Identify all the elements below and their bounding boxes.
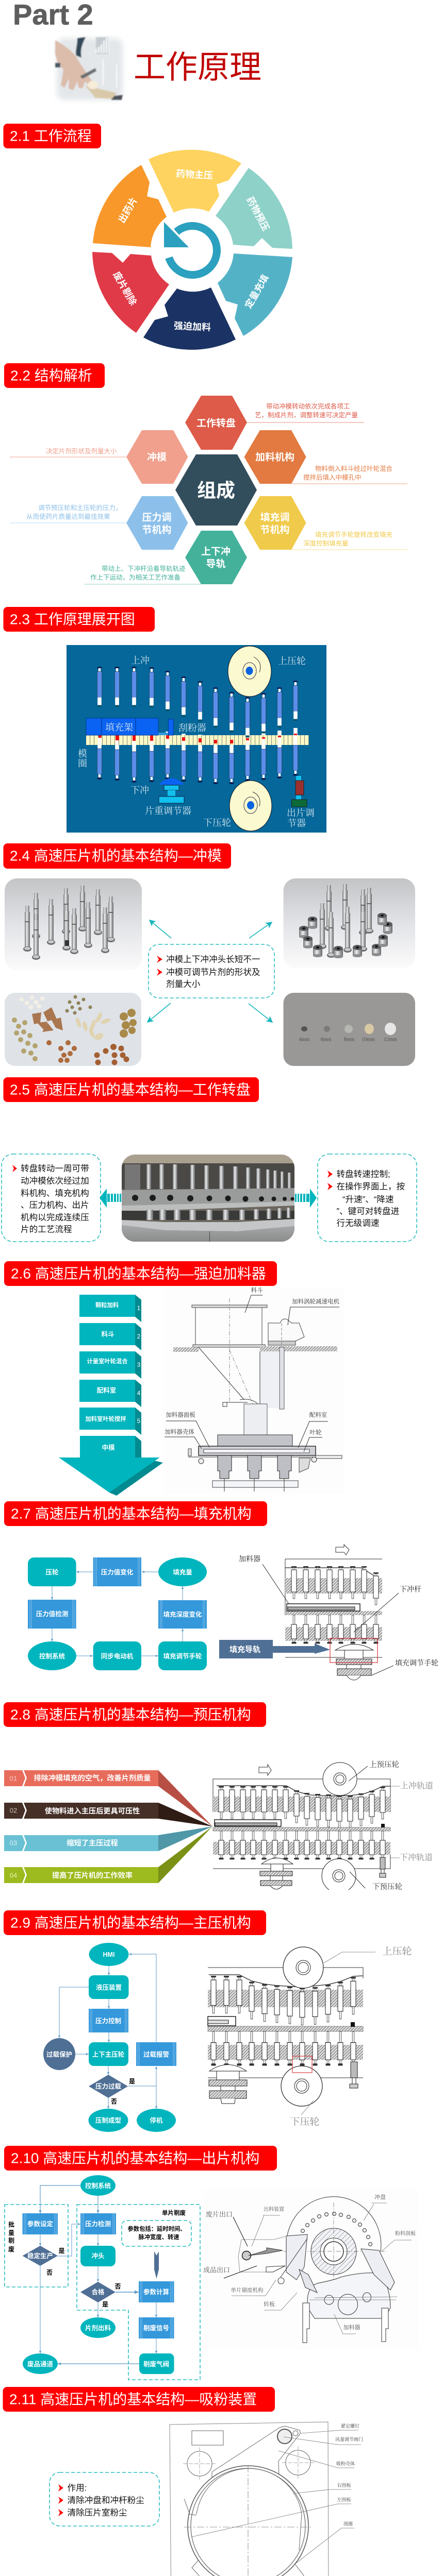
hex: 上下冲导轨: 导轨 bbox=[206, 557, 226, 570]
drawing labels: 下冲轨道 bbox=[400, 1853, 433, 1862]
pre-compression benefit ribbons bbox=[4, 1770, 212, 1883]
feeder step stack bbox=[59, 1295, 163, 1496]
node: 压力控制: 压力控制 bbox=[95, 2017, 121, 2025]
diagram labels: 节器 bbox=[287, 818, 306, 828]
filling rack: 填充架 bbox=[105, 722, 133, 733]
note: 加料机构: 搅拌后填入中模孔中 bbox=[303, 473, 362, 481]
heading 2.7 bbox=[4, 1501, 267, 1526]
drawing labels bbox=[239, 1555, 438, 1675]
heading 2.4: 2.4 高速压片机的基本结构—冲模 bbox=[10, 848, 222, 863]
connectors bbox=[52, 1572, 183, 1656]
step 4: 4 bbox=[137, 1389, 141, 1397]
process wheel bbox=[92, 150, 292, 350]
node: 过载保护 bbox=[43, 2038, 75, 2070]
diagram labels: 刮粉器 bbox=[178, 723, 206, 733]
note: 压力调节机构: 从而使药片质量达到最佳效果 bbox=[26, 513, 110, 520]
node: HMI bbox=[89, 1943, 129, 1966]
hex: 冲模: 冲模 bbox=[147, 451, 167, 463]
callout: turntable function: 料机构、填充机构 bbox=[21, 1188, 89, 1198]
segment: 定量充填: 定量充填 bbox=[242, 273, 271, 310]
drawing labels: 右围板 bbox=[337, 2482, 351, 2488]
diagram labels bbox=[78, 655, 315, 828]
callout: dust collector function: 作用: bbox=[67, 2483, 87, 2493]
segment: 强迫加料 bbox=[143, 287, 236, 350]
node: 液压装置 bbox=[89, 1975, 129, 1999]
photo: tablet sizes: 6mm bbox=[321, 1037, 331, 1043]
drawing labels: 冲盘 bbox=[374, 2193, 386, 2200]
callout: speed control: 在操作界面上，按 bbox=[336, 1182, 405, 1191]
direction arrow bbox=[336, 1545, 349, 1555]
node: 压力值变化: 压力值变化 bbox=[101, 1568, 134, 1576]
hex: 加料机构 bbox=[244, 430, 306, 484]
drawing labels: 风量调节阀门 bbox=[335, 2436, 363, 2442]
drawing labels: 加料涡轮减速电机 bbox=[292, 1298, 339, 1305]
hex: 压力调节机构: 节机构 bbox=[142, 524, 172, 536]
callout: turntable function: 片的工艺流程 bbox=[21, 1224, 72, 1234]
branch labels: 是 bbox=[102, 2301, 108, 2308]
drawing labels: 转板 bbox=[264, 2300, 275, 2308]
working principle unfolded diagram bbox=[67, 645, 326, 833]
segment: 药物主压 bbox=[149, 150, 241, 213]
drawing: filling mechanism bbox=[239, 1545, 438, 1680]
node: 同步电动机 bbox=[93, 1641, 141, 1670]
node: 停机 bbox=[137, 2109, 176, 2132]
drawing labels: 加料器 bbox=[239, 1555, 260, 1563]
upper pressure wheel bbox=[228, 646, 271, 697]
hex: 上下冲导轨 bbox=[185, 531, 247, 584]
drawing labels: 废片出口 bbox=[206, 2210, 233, 2218]
big arrow: 中模: 中模 bbox=[102, 1444, 115, 1451]
drawing: forced feeder bbox=[163, 1286, 344, 1494]
segment: 药物预压 bbox=[216, 168, 292, 249]
connectors bbox=[40, 2185, 156, 2364]
drawing labels: 叶轮 bbox=[309, 1429, 322, 1436]
drawing: ejection mechanism bbox=[203, 2190, 419, 2349]
lower main wheel bbox=[281, 2066, 322, 2106]
node: 合格: 合格 bbox=[91, 2288, 105, 2296]
drawing labels: 上预压轮 bbox=[369, 1760, 399, 1769]
drawing: pre-compression mechanism bbox=[213, 1760, 433, 1893]
note: 压力调节机构 bbox=[10, 504, 126, 523]
segment: 强迫加料: 强迫加料 bbox=[174, 320, 211, 333]
step 2: 料斗 bbox=[101, 1330, 114, 1338]
diagram labels: 模 bbox=[78, 749, 87, 759]
ribbon 01: 01 bbox=[10, 1774, 17, 1783]
ejection adjuster bbox=[292, 776, 307, 807]
heading 2.1 bbox=[3, 124, 101, 148]
ribbon 04 bbox=[4, 1826, 212, 1883]
drawing labels: 粉料刮板 bbox=[395, 2230, 416, 2237]
note: 工作转盘 bbox=[247, 402, 364, 422]
photo: tablet sizes: 10mm bbox=[362, 1037, 375, 1043]
step 5: 加料室叶轮搅拌 bbox=[85, 1415, 126, 1422]
diagram labels: 片重调节器 bbox=[145, 806, 191, 816]
dashed zone: single rejection bbox=[77, 2205, 200, 2380]
diagram labels: 下冲 bbox=[130, 785, 149, 795]
hexagon composition diagram bbox=[10, 396, 407, 584]
tablet ejection flowchart bbox=[5, 2175, 200, 2380]
drawing labels: 成品出口 bbox=[203, 2266, 230, 2274]
drawing labels: 吸粉壳体 bbox=[336, 2461, 355, 2466]
heading 2.9: 2.9 高速压片机的基本结构—主压机构 bbox=[10, 1914, 251, 1931]
node: 压力过载 bbox=[89, 2075, 128, 2098]
dashed zone: single rejection: 单片剔废 bbox=[162, 2209, 186, 2216]
drawing labels: 配料室 bbox=[309, 1411, 327, 1418]
node: 剔废信号 bbox=[139, 2317, 174, 2338]
node: 压力控制 bbox=[89, 2009, 128, 2032]
node: 冲头 bbox=[80, 2246, 116, 2266]
lower punches bbox=[97, 728, 298, 784]
node: 填充深度变化 bbox=[158, 1600, 207, 1629]
step 1 bbox=[79, 1295, 141, 1322]
diagram labels: 上冲 bbox=[131, 655, 150, 666]
note: 填充调节机构 bbox=[291, 531, 407, 550]
parameter note: 参数包括：延时时间、 bbox=[128, 2225, 186, 2232]
segment: 废片剔除: 废片剔除 bbox=[111, 269, 139, 307]
hex: 组成 bbox=[175, 454, 257, 526]
drawing labels: 下压轮 bbox=[290, 2116, 320, 2128]
heading 2.11: 2.11 高速压片机的基本结构—吸粉装置 bbox=[9, 2392, 257, 2407]
ribbon 04: 提高了压片机的工作效率 bbox=[52, 1871, 133, 1880]
direction arrow bbox=[259, 1765, 271, 1775]
hex: 冲模 bbox=[126, 430, 188, 484]
photo: punches and dies group 2 bbox=[284, 878, 415, 968]
arrow: left block bbox=[100, 1189, 121, 1208]
step 4: 配料室 bbox=[97, 1386, 116, 1394]
drawing labels: 下冲杆 bbox=[400, 1585, 421, 1594]
heading 2.10 bbox=[4, 2146, 277, 2171]
node: 控制系统: 控制系统 bbox=[85, 2182, 111, 2190]
parameter note: 脉冲宽度、转速 bbox=[138, 2233, 179, 2241]
die ring bbox=[86, 734, 309, 745]
drawing labels: 加料器 bbox=[343, 2324, 360, 2331]
node: 压制成型 bbox=[89, 2109, 128, 2132]
node: 填充量: 填充量 bbox=[173, 1568, 192, 1576]
node: 剔废气阀: 剔废气阀 bbox=[143, 2360, 169, 2368]
label with arrow: 填充导轨 bbox=[219, 1640, 330, 1658]
drawing labels bbox=[203, 2193, 416, 2334]
note: 填充调节机构: 填充调节手轮旋转改变填充 bbox=[315, 531, 392, 538]
node: 填充调节手轮 bbox=[158, 1641, 207, 1670]
filling handwheel bbox=[260, 1858, 293, 1889]
lower pressure wheel bbox=[229, 781, 272, 831]
dashed zone: batch rejection: 量 bbox=[8, 2229, 14, 2236]
branch labels: 是 bbox=[58, 2247, 65, 2255]
node: 片剂出料: 片剂出料 bbox=[85, 2324, 111, 2332]
node: 压力值检测 bbox=[28, 1600, 76, 1629]
node: 参数设定 bbox=[23, 2213, 58, 2234]
dashed zone: batch rejection bbox=[5, 2205, 68, 2287]
diagram labels: 下压轮 bbox=[203, 818, 231, 828]
heading 2.6: 2.6 高速压片机的基本结构—强迫加料器 bbox=[11, 1265, 266, 1282]
ribbon 02: 02 bbox=[10, 1806, 17, 1815]
upper main wheel bbox=[283, 1947, 323, 1988]
parameter note bbox=[122, 2221, 191, 2246]
photo: tablet sizes bbox=[284, 993, 415, 1066]
segment: 药物预压: 药物预压 bbox=[244, 195, 271, 232]
drawing labels: 上压轮 bbox=[382, 1945, 412, 1957]
spear arrow bbox=[154, 2251, 159, 2279]
drawing labels: 下预压轮 bbox=[372, 1883, 402, 1891]
node: 填充量 bbox=[158, 1557, 207, 1586]
heading 2.6 bbox=[4, 1261, 277, 1286]
hex: 填充调节机构 bbox=[244, 496, 306, 550]
callout: punch notes: 冲模上下冲冲头长短不一 bbox=[166, 954, 260, 964]
node: 压力检测: 压力检测 bbox=[85, 2220, 111, 2228]
callout: turntable function: 、压力机构、出片 bbox=[21, 1200, 89, 1210]
icon: cycle arrow bbox=[164, 222, 217, 275]
callout: speed control: 转盘转速控制; bbox=[336, 1170, 390, 1179]
heading 2.5: 2.5 高速压片机的基本结构—工作转盘 bbox=[10, 1082, 251, 1097]
upper punches bbox=[97, 667, 298, 738]
drawing labels: 左围板 bbox=[337, 2497, 351, 2502]
heading 2.8: 2.8 高速压片机的基本结构—预压机构 bbox=[10, 1706, 251, 1723]
node: 剔废气阀 bbox=[139, 2353, 174, 2374]
photo: assorted tablets bbox=[5, 993, 141, 1066]
hex: 工作转盘 bbox=[185, 396, 247, 450]
ribbon 02: 使物料进入主压后更具可压性 bbox=[45, 1807, 140, 1816]
note: 上下冲导轨 bbox=[84, 565, 201, 584]
step 3: 3 bbox=[137, 1361, 141, 1368]
ribbon 03: 03 bbox=[10, 1839, 17, 1846]
label with arrow: 填充导轨: 填充导轨 bbox=[229, 1645, 260, 1654]
drawing labels bbox=[290, 1945, 412, 2128]
callout: speed control: “升速”、“降速 bbox=[342, 1194, 394, 1205]
node: 过载保护: 过载保护 bbox=[46, 2050, 72, 2058]
arrow: right block bbox=[295, 1189, 317, 1208]
dashed zone: batch rejection: 废 bbox=[8, 2245, 14, 2253]
node: 压力值检测: 压力值检测 bbox=[36, 1610, 68, 1618]
note: 加料机构: 物料倒入料斗经过叶轮混合 bbox=[315, 465, 393, 472]
node: 剔废信号: 剔废信号 bbox=[143, 2324, 169, 2332]
photo: tablet sizes: 8mm bbox=[344, 1037, 354, 1043]
callout: punch notes bbox=[149, 944, 274, 998]
step 4 bbox=[79, 1380, 141, 1407]
step 5: 5 bbox=[137, 1417, 141, 1425]
heading 2.4 bbox=[3, 843, 231, 869]
callout: punch notes: 剂量大小 bbox=[166, 979, 201, 989]
drawing labels: 上冲轨道 bbox=[400, 1782, 433, 1791]
drawing labels bbox=[349, 1760, 433, 1891]
note: 冲模: 决定片剂形状及剂量大小 bbox=[46, 447, 117, 455]
photo: tablet sizes: 4mm bbox=[299, 1037, 309, 1043]
callout: dust collector function bbox=[50, 2472, 159, 2526]
note: 工作转盘: 艺，制成片剂，调整转速可决定产量 bbox=[255, 411, 358, 419]
tablet weight adjuster bbox=[159, 778, 184, 803]
branch labels: 否 bbox=[114, 2283, 121, 2290]
node: 压力检测 bbox=[80, 2213, 116, 2234]
node: 片剂出料 bbox=[80, 2317, 116, 2338]
callout: turntable function: 转盘转动一周可带 bbox=[21, 1163, 89, 1174]
node: 稳定生产: 稳定生产 bbox=[27, 2252, 53, 2260]
node: 废品通道 bbox=[23, 2353, 58, 2374]
node: 压制成型: 压制成型 bbox=[95, 2116, 121, 2124]
ribbon 03 bbox=[4, 1826, 212, 1851]
drawing: dust collector bbox=[170, 2422, 363, 2576]
branch labels: 是 bbox=[129, 2078, 135, 2085]
callout: turntable function bbox=[2, 1154, 101, 1242]
dashed zone: batch rejection: 剔 bbox=[8, 2236, 14, 2244]
upper pre-compression wheel bbox=[323, 1762, 357, 1795]
callout: speed control bbox=[318, 1154, 417, 1242]
diagram labels: 出片调 bbox=[287, 808, 315, 818]
node: 填充深度变化: 填充深度变化 bbox=[163, 1611, 202, 1618]
dashed zone: batch rejection: 批 bbox=[8, 2221, 14, 2228]
heading 2.1: 2.1 工作流程 bbox=[10, 128, 92, 144]
ribbon 01: 排除冲模填充的空气，改善片剂质量 bbox=[34, 1774, 151, 1783]
heading 2.5 bbox=[3, 1077, 259, 1102]
photo: turntable bbox=[122, 1155, 294, 1242]
drawing labels: 填充调节手轮 bbox=[395, 1659, 438, 1667]
node: 填充调节手轮: 填充调节手轮 bbox=[163, 1652, 202, 1660]
node: 同步电动机: 同步电动机 bbox=[101, 1652, 134, 1660]
red highlight box bbox=[330, 1638, 378, 1663]
node: 控制系统 bbox=[28, 1641, 76, 1670]
branch labels: 否 bbox=[111, 2098, 117, 2105]
branch labels bbox=[111, 2078, 135, 2105]
segment: 定量充填 bbox=[218, 253, 292, 336]
callout: speed control: ”、键可对转盘进 bbox=[336, 1207, 399, 1216]
drawing labels: 围圈 bbox=[343, 2521, 353, 2527]
step 2: 2 bbox=[137, 1333, 141, 1340]
heading 2.2 bbox=[4, 363, 105, 388]
arrow: to top left photo bbox=[150, 920, 171, 938]
heading 2.3: 2.3 工作原理展开图 bbox=[10, 611, 135, 628]
heading 2.2: 2.2 结构解析 bbox=[10, 368, 92, 383]
drawing labels: 料斗 bbox=[251, 1286, 263, 1294]
hex: 压力调节机构: 压力调 bbox=[142, 512, 172, 523]
drawing: main compression mechanism bbox=[208, 1945, 412, 2128]
node: 停机: 停机 bbox=[150, 2116, 163, 2124]
step 3 bbox=[79, 1351, 141, 1379]
arrow: to bottom left photo bbox=[147, 1003, 171, 1022]
node: 液压装置: 液压装置 bbox=[96, 1984, 122, 1991]
node: 参数设定: 参数设定 bbox=[27, 2220, 53, 2228]
heading 2.8 bbox=[4, 1702, 266, 1727]
right adjuster bbox=[350, 2062, 358, 2088]
note: 加料机构 bbox=[291, 465, 407, 484]
step 5 bbox=[79, 1408, 141, 1435]
right adjuster bbox=[380, 1857, 386, 1877]
big arrow: 中模 bbox=[59, 1436, 163, 1496]
drawing labels: 加料器面板 bbox=[166, 1411, 195, 1418]
ribbon 04: 04 bbox=[10, 1871, 17, 1879]
heading 2.10: 2.10 高速压片机的基本结构—出片机构 bbox=[11, 2150, 259, 2166]
hex: 填充调节机构: 节机构 bbox=[260, 524, 290, 536]
hex: 组成: 组成 bbox=[197, 480, 235, 501]
node: 压力过载: 压力过载 bbox=[95, 2082, 121, 2090]
photo: tablet sizes: 12mm bbox=[384, 1037, 397, 1043]
drawing labels bbox=[165, 1286, 339, 1452]
diagram labels: 上压轮 bbox=[278, 656, 306, 666]
node: 过载报警 bbox=[136, 2042, 176, 2066]
callout: dust collector function: 清除压片室粉尘 bbox=[67, 2508, 127, 2517]
node: 上下主压轮 bbox=[89, 2042, 128, 2066]
lower pre-compression wheel bbox=[322, 1859, 356, 1893]
node: 参数计算: 参数计算 bbox=[143, 2288, 169, 2296]
hex: 填充调节机构: 填充调 bbox=[260, 511, 290, 523]
ribbon 03: 缩短了主压过程 bbox=[67, 1839, 118, 1848]
node: HMI: HMI bbox=[103, 1951, 114, 1958]
node: 上下主压轮: 上下主压轮 bbox=[92, 2050, 125, 2058]
drawing labels: 出料装置 bbox=[264, 2206, 284, 2212]
segment: 药物主压: 药物主压 bbox=[176, 168, 213, 181]
arrow: to bottom right photo bbox=[249, 1004, 272, 1022]
step 3: 计量室叶轮混合 bbox=[87, 1358, 128, 1365]
step 2 bbox=[79, 1323, 141, 1350]
node: 控制系统: 控制系统 bbox=[39, 1652, 65, 1660]
hex: 上下冲导轨: 上下冲 bbox=[201, 546, 231, 557]
main heading: 工作原理 bbox=[134, 49, 261, 86]
branch labels: 否 bbox=[46, 2269, 53, 2276]
handwheel bbox=[209, 2065, 247, 2104]
hex: 工作转盘: 工作转盘 bbox=[196, 417, 236, 429]
red highlight box bbox=[292, 2056, 312, 2073]
callout: turntable function: 动冲模依次经过加 bbox=[21, 1176, 89, 1186]
note: 填充调节机构: 深度控制填充量 bbox=[303, 539, 349, 547]
heading 2.7: 2.7 高速压片机的基本结构—填充机构 bbox=[11, 1505, 252, 1522]
photo: hand touching tablet bbox=[55, 35, 123, 100]
callout: punch notes: 冲模可调节片剂的形状及 bbox=[166, 968, 260, 977]
arrow: to top right photo bbox=[249, 922, 272, 938]
segment: 废片剔除 bbox=[92, 252, 169, 333]
connectors bbox=[59, 1954, 156, 2109]
node: 控制系统 bbox=[80, 2175, 116, 2196]
node: 压力值变化 bbox=[93, 1557, 141, 1586]
heading 2.9 bbox=[4, 1910, 266, 1935]
drawing labels: 加料器壳体 bbox=[165, 1428, 194, 1435]
filling rack bbox=[86, 718, 173, 735]
drawing labels: 单片剔废机构 bbox=[231, 2286, 264, 2294]
segment: 出药片 bbox=[93, 165, 167, 247]
callout: dust collector function: 清除冲盘和冲杆粉尘 bbox=[67, 2496, 144, 2505]
node: 过载报警: 过载报警 bbox=[143, 2050, 169, 2058]
photo: punches and dies group 1 bbox=[5, 878, 142, 970]
filling mechanism flowchart bbox=[28, 1557, 207, 1670]
node: 压轮: 压轮 bbox=[45, 1568, 59, 1576]
main compression flowchart bbox=[43, 1943, 176, 2132]
segment: 出药片: 出药片 bbox=[117, 196, 139, 225]
ribbon 01 bbox=[4, 1770, 212, 1826]
node: 合格 bbox=[80, 2282, 116, 2302]
note: 上下冲导轨: 作上下运动，为相关工艺作准备 bbox=[90, 574, 181, 581]
callout: speed control: 行无级调速 bbox=[336, 1218, 379, 1228]
hex: 压力调节机构 bbox=[126, 496, 188, 550]
node: 冲头: 冲头 bbox=[91, 2252, 105, 2260]
ribbon 02 bbox=[4, 1803, 212, 1826]
callout: turntable function: 机构以完成连续压 bbox=[21, 1213, 89, 1222]
diagram labels: 圈 bbox=[78, 758, 87, 769]
node: 稳定生产 bbox=[23, 2246, 58, 2266]
branch labels bbox=[46, 2247, 121, 2308]
note: 上下冲导轨: 带动上、下冲杆沿着导轨轨迹 bbox=[102, 565, 186, 572]
drawing labels bbox=[192, 2423, 363, 2563]
note: 压力调节机构: 调节预压轮和主压轮的压力， bbox=[38, 504, 122, 512]
heading 2.3 bbox=[3, 607, 155, 632]
hex: 加料机构: 加料机构 bbox=[255, 451, 294, 463]
node: 参数计算 bbox=[139, 2281, 174, 2302]
note: 工作转盘: 带动冲模转动依次完成各项工 bbox=[266, 402, 350, 410]
node: 废品通道: 废品通道 bbox=[27, 2360, 53, 2368]
heading 2.11 bbox=[3, 2387, 275, 2412]
node: 压轮 bbox=[28, 1557, 76, 1586]
step 1: 颗粒加料 bbox=[95, 1301, 119, 1309]
drawing labels: 紧定螺钉 bbox=[341, 2423, 359, 2429]
step 1: 1 bbox=[137, 1304, 141, 1312]
